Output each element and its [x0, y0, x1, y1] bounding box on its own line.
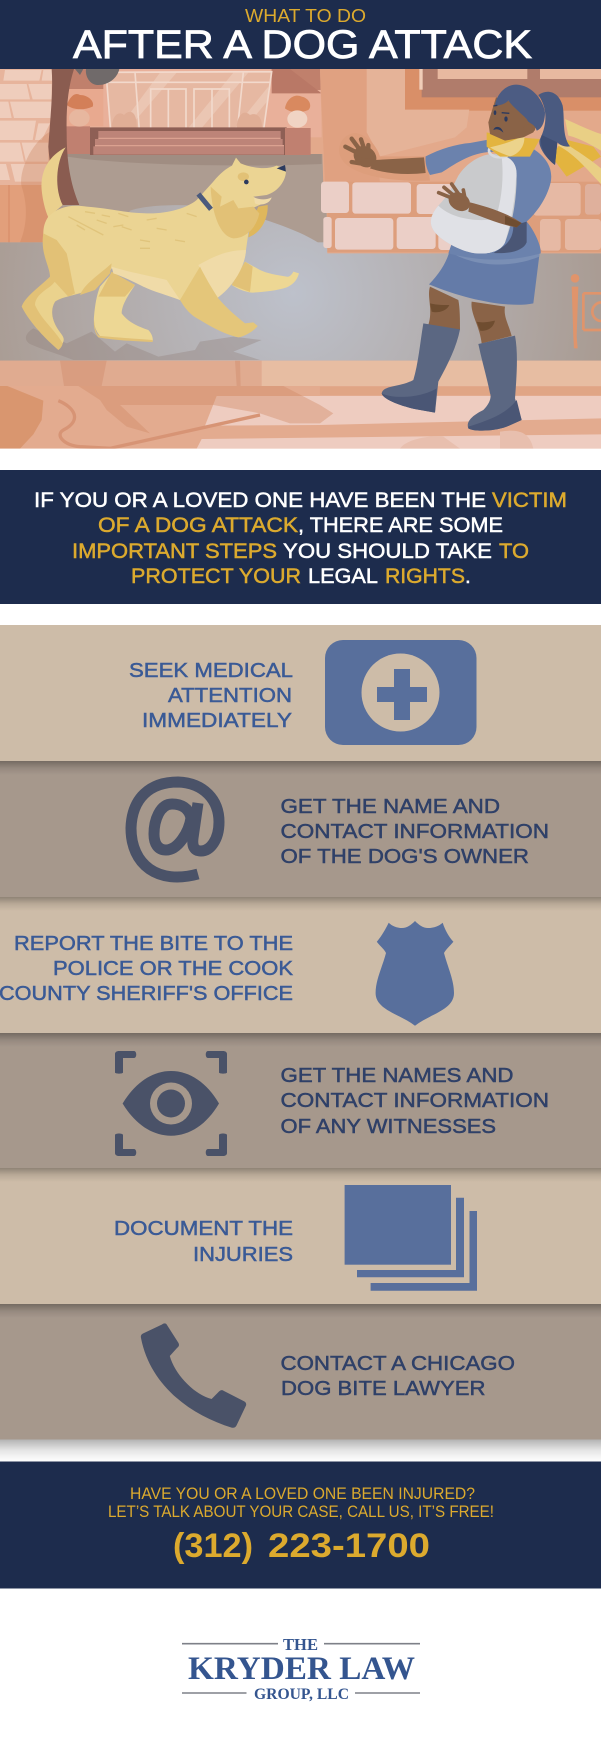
step 1: seek medical attention — [0, 625, 601, 761]
step text: INJURIES — [193, 1243, 293, 1266]
step text: IMMEDIATELY — [142, 709, 292, 732]
icon: eye in focus brackets — [115, 1051, 227, 1156]
step text: POLICE OR THE COOK — [53, 957, 293, 980]
intro statement panel: RIGHTS — [385, 565, 465, 588]
street and driveway — [0, 154, 601, 361]
title banner — [0, 0, 601, 69]
intro statement panel — [0, 470, 601, 604]
intro statement panel: LEGAL — [308, 565, 378, 588]
step text — [280, 1064, 549, 1138]
hair — [495, 85, 545, 131]
step text: GET THE NAME AND — [280, 795, 500, 818]
boots — [382, 323, 460, 413]
dog rear leg — [22, 276, 80, 350]
step text: DOCUMENT THE — [114, 1217, 293, 1240]
intro statement panel: PROTECT YOUR — [131, 565, 301, 588]
legs — [428, 287, 460, 330]
step text: CONTACT A CHICAGO — [280, 1352, 515, 1375]
step 5: document the injuries — [0, 1168, 601, 1304]
step text — [0, 932, 293, 1005]
near arm and hand — [439, 184, 522, 227]
right building — [320, 69, 601, 253]
dog shadow — [26, 328, 262, 360]
hand halo — [373, 144, 430, 181]
ponytail — [538, 92, 570, 165]
call to action panel: HAVE YOU OR A LOVED ONE BEEN INJURED? — [130, 1485, 475, 1503]
dog body — [43, 182, 248, 300]
icon: medical kit — [325, 640, 476, 745]
backpack — [431, 154, 517, 253]
bodice — [448, 149, 551, 260]
outstretched arm and hand — [345, 139, 426, 174]
gate ornament — [571, 274, 601, 348]
icon: police badge — [376, 921, 454, 1026]
intro statement panel: OF A DOG ATTACK — [98, 514, 298, 537]
tree top foliage — [75, 69, 119, 85]
intro statement panel: , THERE ARE SOME — [298, 514, 503, 537]
step text: GET THE NAMES AND — [280, 1064, 514, 1087]
face details — [494, 110, 496, 115]
step text: OF ANY WITNESSES — [280, 1115, 496, 1138]
dog head — [198, 158, 286, 238]
step text — [129, 659, 293, 732]
intro statement panel: TO — [499, 540, 529, 563]
phone number: 223-1700 — [268, 1527, 430, 1565]
step 3: report the bite — [0, 897, 601, 1033]
step text — [280, 1352, 515, 1400]
icon: at sign — [131, 782, 219, 877]
logo: The Kryder Law Group, LLC — [182, 1635, 420, 1703]
left brick wall — [0, 69, 53, 242]
call to action panel — [0, 1462, 601, 1588]
potted plants — [67, 94, 93, 109]
step text: CONTACT INFORMATION — [280, 820, 549, 843]
step text — [280, 795, 549, 868]
dog belly highlights — [198, 250, 246, 298]
logo: The Kryder Law Group, LLC: THE — [283, 1635, 318, 1654]
dog tail — [41, 147, 66, 217]
dog collar — [198, 194, 211, 209]
logo: The Kryder Law Group, LLC: GROUP, LLC — [254, 1686, 349, 1703]
scarf tails — [553, 119, 601, 184]
hero illustration: dog approaching frightened woman — [0, 69, 601, 449]
dog nose and eye — [277, 165, 286, 172]
sidewalk — [0, 361, 601, 449]
building entrance — [66, 69, 322, 155]
step text: DOG BITE LAWYER — [281, 1377, 486, 1400]
intro statement panel: VICTIM — [492, 489, 567, 512]
intro statement panel: YOU SHOULD TAKE — [283, 540, 492, 563]
neck scarf — [487, 132, 540, 157]
step text: REPORT THE BITE TO THE — [14, 932, 293, 955]
dog raised front leg — [232, 262, 299, 293]
intro statement panel: . — [465, 565, 471, 588]
step 2: get owner contact information — [0, 761, 601, 897]
call to action panel: LET’S TALK ABOUT YOUR CASE, CALL US, IT’S FREE! — [108, 1503, 494, 1521]
icon: telephone handset — [141, 1323, 246, 1428]
intro statement panel: IMPORTANT STEPS — [72, 540, 277, 563]
step text: ATTENTION — [168, 684, 292, 707]
dog near front leg — [180, 267, 258, 337]
brick wall — [321, 182, 601, 252]
step text — [114, 1217, 293, 1266]
step 4: witnesses — [0, 1033, 601, 1168]
title banner: AFTER A DOG ATTACK — [73, 23, 532, 67]
phone number — [173, 1527, 430, 1565]
logo: The Kryder Law Group, LLC: KRYDER LAW — [188, 1651, 415, 1687]
step text: COUNTY SHERIFF'S OFFICE — [0, 982, 293, 1005]
skirt — [429, 250, 540, 305]
head — [488, 97, 537, 141]
step 6: contact a lawyer — [0, 1304, 601, 1440]
title kicker: WHAT TO DO — [245, 6, 366, 26]
dog hind leg — [94, 273, 153, 341]
icon: stacked documents — [345, 1185, 477, 1291]
dog — [22, 147, 299, 350]
tree trunk — [48, 69, 79, 205]
step text: CONTACT INFORMATION — [280, 1089, 549, 1112]
dog fur marks — [68, 212, 197, 248]
woman — [345, 85, 570, 431]
step text: OF THE DOG'S OWNER — [280, 845, 529, 868]
sleeve — [426, 140, 500, 175]
phone number: (312) — [173, 1527, 253, 1565]
intro statement panel: IF YOU OR A LOVED ONE HAVE BEEN THE — [34, 489, 486, 512]
step text: SEEK MEDICAL — [129, 659, 293, 682]
